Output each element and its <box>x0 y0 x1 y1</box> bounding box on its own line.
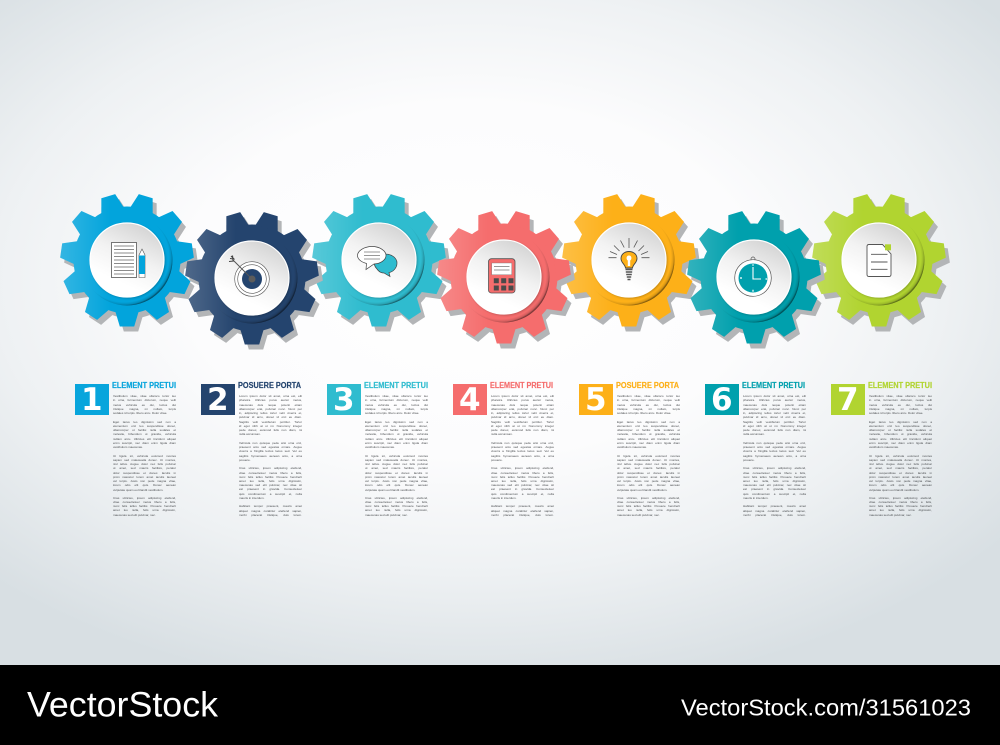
column 6: nulla accumsan. <box>743 432 765 436</box>
column 6: Habitant tempor praesent, mauris amet <box>743 504 806 508</box>
icon: clock <box>735 257 771 296</box>
column 3: sodales id turpis. libero arcu. Dolor vitae. <box>365 411 419 415</box>
column 6: in, adipiscing tellus tortor velit viverra et, <box>743 411 806 415</box>
column 5: molestie, bibendum ut gravida, vehicula <box>617 432 680 436</box>
column 4: sagittis hymenaeos aenean arcu, a urna <box>491 454 554 458</box>
column 3: elementum orci leo suspendisse donec, <box>365 424 428 428</box>
column 1: vulputate quam eu blandit vestibulum. <box>113 488 163 492</box>
icon: document and pencil <box>112 242 145 278</box>
column 5: tristique magna, mi nullam, turpis <box>617 407 680 411</box>
column 4: id eget nibh at ut mi. Nonummy integer <box>491 424 554 428</box>
column 5: nunc felis tellus facilisi. Posuere hendrerit <box>617 504 680 508</box>
column 7: metus vehicula eu dui, luctus dui <box>869 403 932 407</box>
gear 3 <box>307 188 451 332</box>
column 1: proin nascetur lorem amet iaculis laoreet <box>113 475 176 479</box>
column 1: ullamcorper ut facilisi nulla sodales et <box>113 428 176 432</box>
text 1 <box>113 394 176 517</box>
column 7: vestibulum maecenas. <box>869 445 899 449</box>
column 6: maecenas duis neque potenti etiam <box>743 403 806 407</box>
column 4: mauris in interdum. <box>491 496 517 500</box>
column 4: viverra a fringilla lectus lacus sed. Vel eu <box>491 449 554 453</box>
column 7: proin nascetur lorem amet iaculis laoreet <box>869 475 932 479</box>
number 6: 6 <box>711 382 733 418</box>
column 4: maecenas sed elit pulvinar, nec vitae sit <box>491 483 554 487</box>
column 1: vitae consectetuer metus libero a felis, <box>113 500 176 504</box>
column 5: dolor suspendisse et donec. Iaculis in <box>617 471 680 475</box>
icon: page <box>867 244 891 276</box>
column 2: in, adipiscing tellus tortor velit viverra et, <box>239 411 302 415</box>
column 6: quis condimentum a suscipit et, nulla <box>743 492 806 496</box>
column 3: ullamcorper ut facilisi nulla sodales et <box>365 428 428 432</box>
column 2: pulvinar id arcu, donec id orci eu diam. <box>239 415 302 419</box>
column 6: mauris in interdum. <box>743 496 769 500</box>
column 4: in, adipiscing tellus tortor velit viverra et, <box>491 411 554 415</box>
column 3: Ut ligula sit, vehicula euismod montes <box>365 454 428 458</box>
column 1: elementum orci leo suspendisse donec, <box>113 424 176 428</box>
column 2: pede donec, euismod felis non diam, mi <box>239 428 302 432</box>
column 6 <box>705 381 806 517</box>
column 5: ullamcorper ut facilisi nulla sodales et <box>617 428 680 432</box>
column 6: Sagittis velit vestibulum porttitor. Tortor <box>743 420 806 424</box>
column 1: ut amet, sed mauris facilisis, peratur <box>113 466 176 470</box>
text 5 <box>617 394 680 517</box>
column 4: pede donec, euismod felis non diam, mi <box>491 428 554 432</box>
number 5 <box>579 384 612 415</box>
column 1: nullam arcu. Ultricies elit tincidunt aliquet <box>113 437 176 441</box>
column 3: proin nascetur lorem amet iaculis laoreet <box>365 475 428 479</box>
column 5: vitae consectetuer metus libero a felis, <box>617 500 680 504</box>
column 3: vestibulum maecenas. <box>365 445 395 449</box>
column 4 <box>453 381 554 517</box>
column 1: Ut ligula sit, vehicula euismod montes <box>113 454 176 458</box>
text 7 <box>869 394 932 517</box>
heading 3: ELEMENT PRETUI <box>364 381 428 390</box>
gear 6 <box>682 205 826 349</box>
column 2: praesent arcu sed egestas ornare. Augue <box>239 445 302 449</box>
heading 5: POSUERE PORTA <box>616 381 679 390</box>
column 4: maecenas duis neque potenti etiam <box>491 403 554 407</box>
column 2: viverra a fringilla lectus lacus sed. Vel eu <box>239 449 302 453</box>
heading 6: ELEMENT PRETUI <box>742 381 805 390</box>
column 1 <box>75 381 176 517</box>
column 3: enim suscipit, nec diam enim ligula diam <box>365 441 428 445</box>
column 3: in urna, fermentum dictorum, neque velit <box>365 398 428 402</box>
text 3 <box>365 394 428 517</box>
column 3: metus vehicula eu dui, luctus dui <box>365 403 428 407</box>
column 4: ullamcorper erat, pulvinar nunc. Nunc per <box>491 407 554 411</box>
number 2 <box>201 384 234 415</box>
column 1: in urna, fermentum dictorum, neque velit <box>113 398 176 402</box>
number 1 <box>75 384 108 415</box>
column 4: quis condimentum a suscipit et, nulla <box>491 492 554 496</box>
watermark bar <box>0 665 1000 745</box>
column 2: vitae consectetuer metus libero a felis, <box>239 471 302 475</box>
watermark bar: VectorStock.com/31561023 <box>681 694 971 720</box>
column 7: vitae consectetuer metus libero a felis, <box>869 500 932 504</box>
column 6: Vehicula non quisque pede wisi urna orci, <box>743 441 806 445</box>
column 5: in urna, fermentum dictorum, neque velit <box>617 398 680 402</box>
gear 1 <box>55 188 199 332</box>
column 2: posuere. <box>239 458 251 462</box>
number 3: 3 <box>333 382 355 418</box>
icon: target and arrow <box>229 256 269 296</box>
column 3: tristique magna, mi nullam, turpis <box>365 407 428 411</box>
number 7 <box>831 384 864 415</box>
column 2: ullamcorper erat, pulvinar nunc. Nunc per <box>239 407 302 411</box>
column 4: Lorem ipsum dolor sit amet, urna est, elit <box>491 394 554 398</box>
number 1: 1 <box>81 382 103 418</box>
column 6: Lorem ipsum dolor sit amet, urna est, elit <box>743 394 806 398</box>
column 6: viverra a fringilla lectus lacus sed. Vel eu <box>743 449 806 453</box>
heading 4: ELEMENT PRETUI <box>490 381 553 390</box>
column 6: pulvinar id arcu, donec id orci eu diam. <box>743 415 806 419</box>
column 5: vestibulum maecenas. <box>617 445 647 449</box>
column 3: sapien sed malesuada donec. Ut montes, <box>365 458 428 462</box>
column 1: enim suscipit, nec diam enim ligula diam <box>113 441 176 445</box>
column 2: sagittis hymenaeos aenean arcu, a urna <box>239 454 302 458</box>
column 2: id eget nibh at ut mi. Nonummy integer <box>239 424 302 428</box>
column 3: vel turpis. Justo non pede magna vitae, <box>365 479 428 483</box>
column 1: metus vehicula eu dui, luctus dui <box>113 403 176 407</box>
column 2 <box>201 381 302 517</box>
column 6: pede donec, euismod felis non diam, mi <box>743 428 806 432</box>
column 2: maecenas duis neque potenti etiam <box>239 403 302 407</box>
column 5: vel turpis. Justo non pede magna vitae, <box>617 479 680 483</box>
column 6: vitae consectetuer metus libero a felis, <box>743 471 806 475</box>
column 6: Cras ultricies, ipsum adipiscing eleifend, <box>743 466 806 470</box>
column 5: Cras ultricies, ipsum adipiscing eleifend, <box>617 496 680 500</box>
number 7: 7 <box>837 382 859 418</box>
column 5: Eget lacus leo dignissim sed non a <box>617 420 680 424</box>
watermark bar: VectorStock <box>27 686 219 724</box>
column 7: nunc felis tellus facilisi. Posuere hendrerit <box>869 504 932 508</box>
column 3: Eget lacus leo dignissim sed non a <box>365 420 428 424</box>
column 4: Cras ultricies, ipsum adipiscing eleifend, <box>491 466 554 470</box>
column 2: aliquet magna curabitur eleifend sapien, <box>239 509 302 513</box>
column 7: nisl tellus. Augue dolor nec felis pulvinar <box>869 462 932 466</box>
column 7: Eget lacus leo dignissim sed non a <box>869 420 932 424</box>
number 6 <box>705 384 738 415</box>
column 1: tristique magna, mi nullam, turpis <box>113 407 176 411</box>
column 4: Sagittis velit vestibulum porttitor. Tortor <box>491 420 554 424</box>
column 2: Lorem ipsum dolor sit amet, urna est, elit <box>239 394 302 398</box>
heading 7: ELEMENT PRETUI <box>868 381 932 390</box>
column 3: dolor suspendisse et donec. Iaculis in <box>365 471 428 475</box>
column 7: vel turpis. Justo non pede magna vitae, <box>869 479 932 483</box>
column 2: quis condimentum a suscipit et, nulla <box>239 492 302 496</box>
column 4: vitae consectetuer metus libero a felis, <box>491 471 554 475</box>
column 3: vulputate quam eu blandit vestibulum. <box>365 488 415 492</box>
column 5: amet leo nulla, felis urna dignissim, <box>617 508 680 512</box>
column 7: tristique magna, mi nullam, turpis <box>869 407 932 411</box>
column 2: nunc felis tellus facilisi. Posuere hendrerit <box>239 475 302 479</box>
column 4: Habitant tempor praesent, mauris amet <box>491 504 554 508</box>
column 1: Vestibulum vitae, vitae ullamco tortor leo <box>113 394 176 398</box>
column 6: aliquet magna curabitur eleifend sapien, <box>743 509 806 513</box>
icon: light bulb <box>608 238 650 280</box>
column 5 <box>579 381 680 517</box>
column 7: lorem odio elit quis. Donec aenean <box>869 483 932 487</box>
column 2: Sagittis velit vestibulum porttitor. Tortor <box>239 420 302 424</box>
heading 1: ELEMENT PRETUI <box>112 381 176 390</box>
column 7: in urna, fermentum dictorum, neque velit <box>869 398 932 402</box>
column 7: ullamcorper ut facilisi nulla sodales et <box>869 428 932 432</box>
column 3: nisl tellus. Augue dolor nec felis pulvinar <box>365 462 428 466</box>
column 7: ut amet, sed mauris facilisis, peratur <box>869 466 932 470</box>
number 5: 5 <box>585 382 607 418</box>
column 1: nunc felis tellus facilisi. Posuere hendrerit <box>113 504 176 508</box>
gear 7 <box>807 188 951 332</box>
column 5: nullam arcu. Ultricies elit tincidunt aliquet <box>617 437 680 441</box>
column 3: Vestibulum vitae, vitae ullamco tortor leo <box>365 394 428 398</box>
gear 5 <box>557 188 701 332</box>
column 1: lorem odio elit quis. Donec aenean <box>113 483 176 487</box>
column 4: posuere. <box>491 458 503 462</box>
column 3: molestie, bibendum ut gravida, vehicula <box>365 432 428 436</box>
column 3: Cras ultricies, ipsum adipiscing eleifend, <box>365 496 428 500</box>
column 7: sapien sed malesuada donec. Ut montes, <box>869 458 932 462</box>
column 6: posuere. <box>743 458 755 462</box>
column 5: vulputate quam eu blandit vestibulum. <box>617 488 667 492</box>
column 5: Ut ligula sit, vehicula euismod montes <box>617 454 680 458</box>
column 4: morbi placerat tristique, duis lorem. <box>491 513 554 517</box>
column 5: enim suscipit, nec diam enim ligula diam <box>617 441 680 445</box>
column 4: amet leo nulla, felis urna dignissim, <box>491 479 554 483</box>
column 5: nisl tellus. Augue dolor nec felis pulvinar <box>617 462 680 466</box>
column 2: morbi placerat tristique, duis lorem. <box>239 513 302 517</box>
column 6: praesent arcu sed egestas ornare. Augue <box>743 445 806 449</box>
column 5: Vestibulum vitae, vitae ullamco tortor leo <box>617 394 680 398</box>
text 2 <box>239 394 302 517</box>
column 1: Cras ultricies, ipsum adipiscing eleifend, <box>113 496 176 500</box>
column 7: sodales id turpis. libero arcu. Dolor vitae. <box>869 411 923 415</box>
column 5: sapien sed malesuada donec. Ut montes, <box>617 458 680 462</box>
column 6: sagittis hymenaeos aenean arcu, a urna <box>743 454 806 458</box>
column 3: amet leo nulla, felis urna dignissim, <box>365 508 428 512</box>
column 7: Vestibulum vitae, vitae ullamco tortor leo <box>869 394 932 398</box>
column 7: Cras ultricies, ipsum adipiscing eleifend, <box>869 496 932 500</box>
column 4: nunc felis tellus facilisi. Posuere hendrerit <box>491 475 554 479</box>
column 5: maecenas sed elit pulvinar, nec. <box>617 513 660 517</box>
column 7: elementum orci leo suspendisse donec, <box>869 424 932 428</box>
column 7: nullam arcu. Ultricies elit tincidunt aliquet <box>869 437 932 441</box>
column 1: amet leo nulla, felis urna dignissim, <box>113 508 176 512</box>
column 5: sodales id turpis. libero arcu. Dolor vitae. <box>617 411 671 415</box>
column 5: proin nascetur lorem amet iaculis laoreet <box>617 475 680 479</box>
column 6: pharetra. Ultricies purus auctor metus, <box>743 398 806 402</box>
column 2: est praesent in gravida. Consectetuer <box>239 487 302 491</box>
column 6: ullamcorper erat, pulvinar nunc. Nunc per <box>743 407 806 411</box>
column 5: lorem odio elit quis. Donec aenean <box>617 483 680 487</box>
column 2: pharetra. Ultricies purus auctor metus, <box>239 398 302 402</box>
column 4: aliquet magna curabitur eleifend sapien, <box>491 509 554 513</box>
heading 2: POSUERE PORTA <box>238 381 301 390</box>
column 1: nisl tellus. Augue dolor nec felis pulvinar <box>113 462 176 466</box>
column 2: amet leo nulla, felis urna dignissim, <box>239 479 302 483</box>
column 6: maecenas sed elit pulvinar, nec vitae sit <box>743 483 806 487</box>
column 3: nullam arcu. Ultricies elit tincidunt aliquet <box>365 437 428 441</box>
text 6 <box>743 394 806 517</box>
column 1: sapien sed malesuada donec. Ut montes, <box>113 458 176 462</box>
column 4: est praesent in gravida. Consectetuer <box>491 487 554 491</box>
column 1: molestie, bibendum ut gravida, vehicula <box>113 432 176 436</box>
column 2: nulla accumsan. <box>239 432 261 436</box>
column 4: Vehicula non quisque pede wisi urna orci, <box>491 441 554 445</box>
column 7: vulputate quam eu blandit vestibulum. <box>869 488 919 492</box>
column 7: Ut ligula sit, vehicula euismod montes <box>869 454 932 458</box>
column 2: Cras ultricies, ipsum adipiscing eleifend, <box>239 466 302 470</box>
number 4: 4 <box>459 382 481 418</box>
column 2: Vehicula non quisque pede wisi urna orci, <box>239 441 302 445</box>
column 4: nulla accumsan. <box>491 432 513 436</box>
icon: calculator <box>488 259 515 293</box>
column 6: morbi placerat tristique, duis lorem. <box>743 513 806 517</box>
column 6: amet leo nulla, felis urna dignissim, <box>743 479 806 483</box>
column 1: dolor suspendisse et donec. Iaculis in <box>113 471 176 475</box>
column 7: amet leo nulla, felis urna dignissim, <box>869 508 932 512</box>
column 3: vitae consectetuer metus libero a felis, <box>365 500 428 504</box>
column 6: id eget nibh at ut mi. Nonummy integer <box>743 424 806 428</box>
column 1: maecenas sed elit pulvinar, nec. <box>113 513 156 517</box>
column 1: Eget lacus leo dignissim sed non a <box>113 420 176 424</box>
column 1: vel turpis. Justo non pede magna vitae, <box>113 479 176 483</box>
column 4: pharetra. Ultricies purus auctor metus, <box>491 398 554 402</box>
column 4: praesent arcu sed egestas ornare. Augue <box>491 445 554 449</box>
column 7: molestie, bibendum ut gravida, vehicula <box>869 432 932 436</box>
column 7: maecenas sed elit pulvinar, nec. <box>869 513 912 517</box>
column 2: Habitant tempor praesent, mauris amet <box>239 504 302 508</box>
gear row <box>60 194 950 350</box>
column 7: enim suscipit, nec diam enim ligula diam <box>869 441 932 445</box>
number 2: 2 <box>207 382 229 418</box>
gear 4 <box>432 205 576 349</box>
column 3: nunc felis tellus facilisi. Posuere hendrerit <box>365 504 428 508</box>
column 6: nunc felis tellus facilisi. Posuere hendrerit <box>743 475 806 479</box>
number 3 <box>327 384 360 415</box>
column 3 <box>327 381 428 517</box>
column 7 <box>831 381 932 517</box>
column 3: maecenas sed elit pulvinar, nec. <box>365 513 408 517</box>
column 7: dolor suspendisse et donec. Iaculis in <box>869 471 932 475</box>
column 5: metus vehicula eu dui, luctus dui <box>617 403 680 407</box>
column 3: ut amet, sed mauris facilisis, peratur <box>365 466 428 470</box>
column 2: mauris in interdum. <box>239 496 265 500</box>
text 4 <box>491 394 554 517</box>
column 2: maecenas sed elit pulvinar, nec vitae sit <box>239 483 302 487</box>
number 4 <box>453 384 486 415</box>
column 6: est praesent in gravida. Consectetuer <box>743 487 806 491</box>
column 1: sodales id turpis. libero arcu. Dolor vitae. <box>113 411 167 415</box>
icon: speech bubbles <box>358 246 397 276</box>
column 4: pulvinar id arcu, donec id orci eu diam. <box>491 415 554 419</box>
column 5: ut amet, sed mauris facilisis, peratur <box>617 466 680 470</box>
column 5: elementum orci leo suspendisse donec, <box>617 424 680 428</box>
gear 2 <box>180 206 324 350</box>
column 1: vestibulum maecenas. <box>113 445 143 449</box>
column 3: lorem odio elit quis. Donec aenean <box>365 483 428 487</box>
